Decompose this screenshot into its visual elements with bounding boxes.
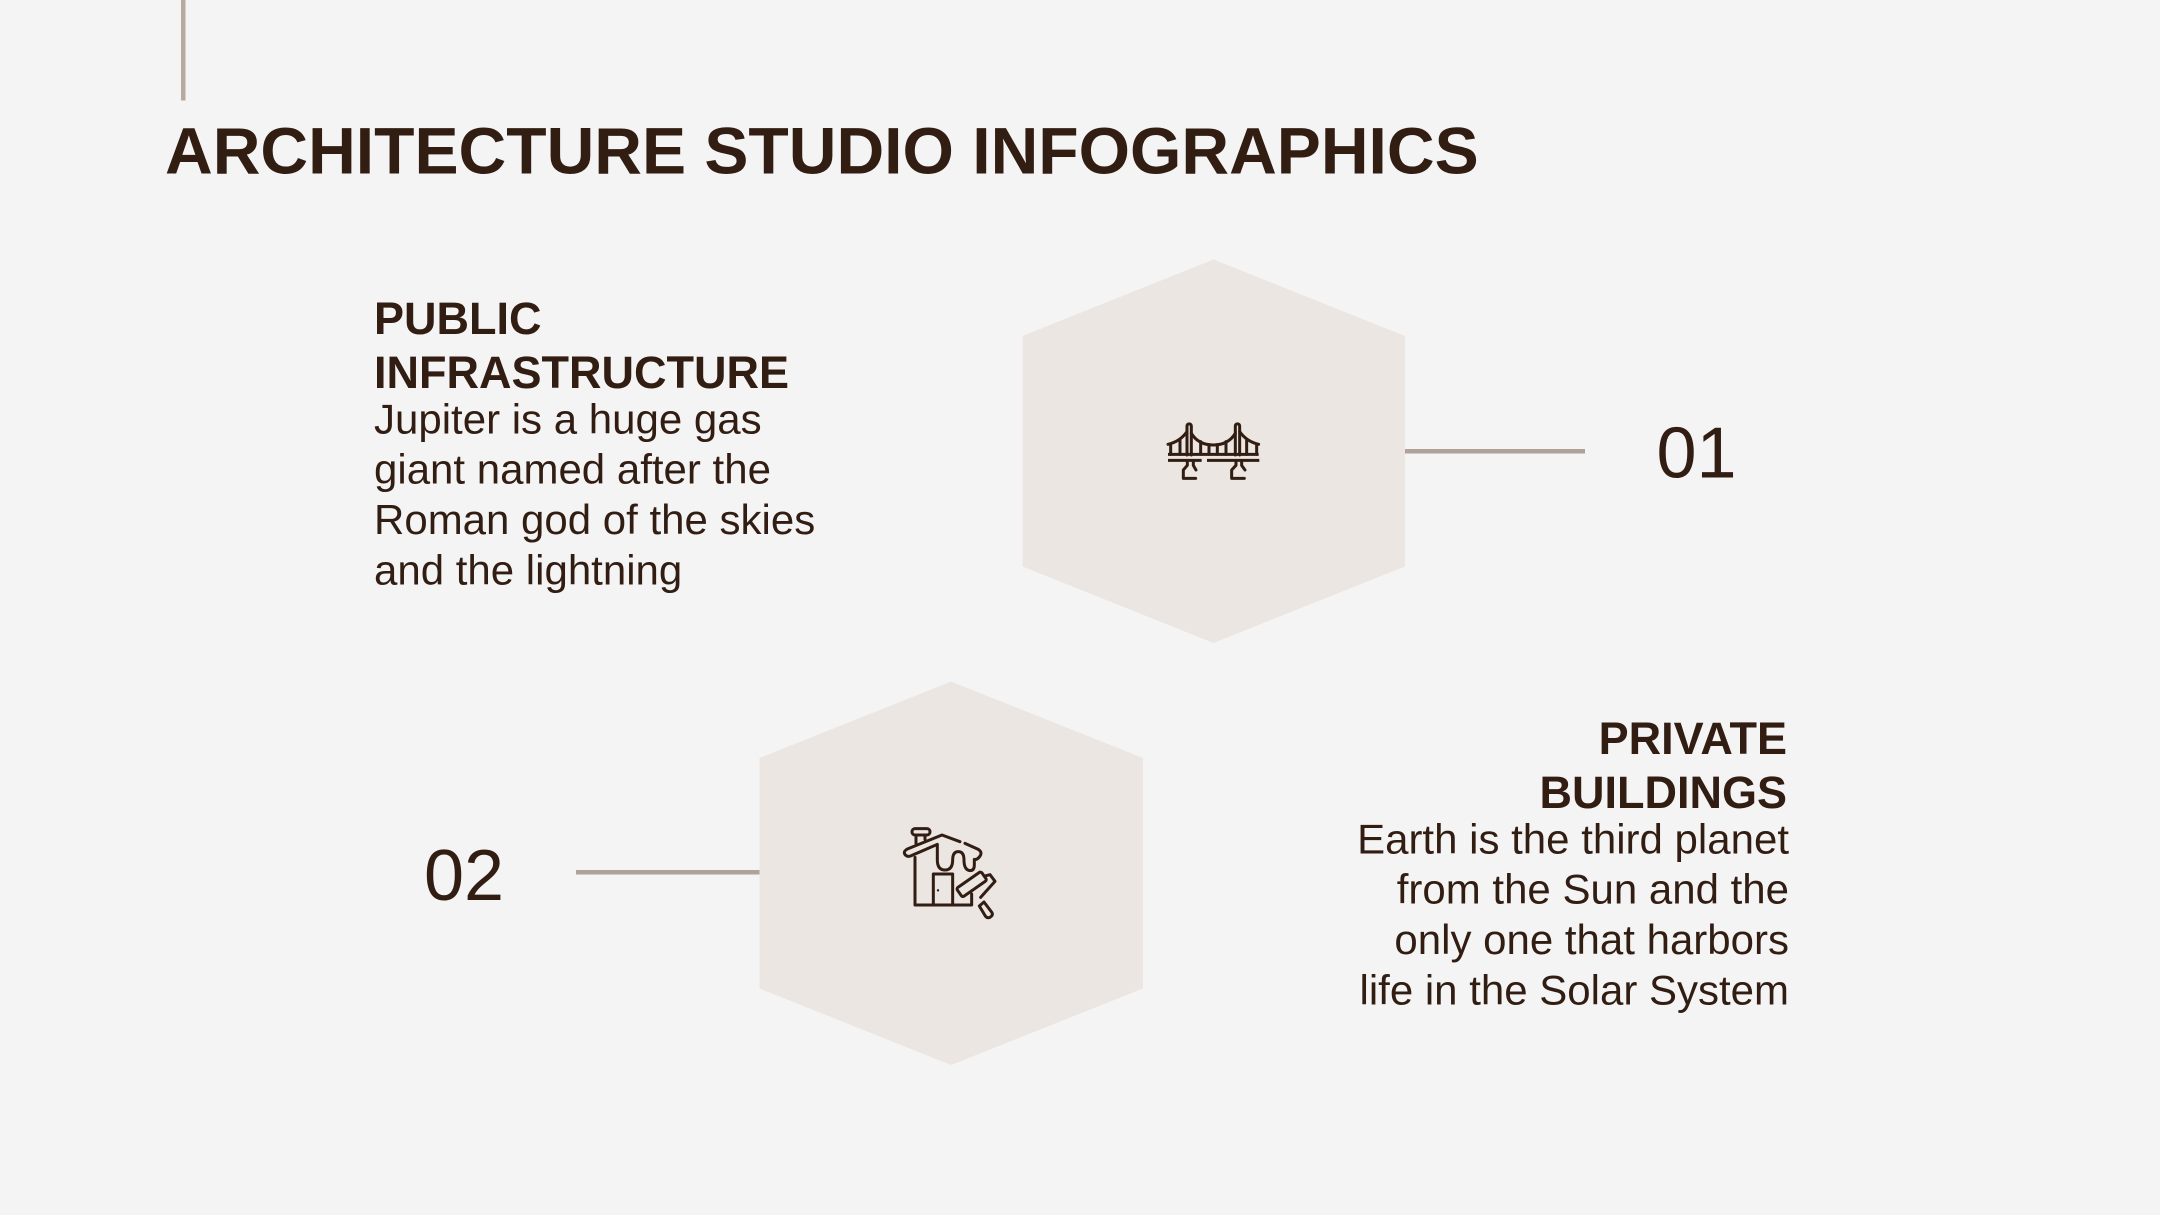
- hexagon 2: [760, 682, 1143, 1065]
- heading: public infrastructure: PUBLIC: [374, 293, 542, 344]
- hexagon 1: [1022, 260, 1405, 643]
- heading: private buildings: [1540, 713, 1787, 818]
- text block: public infrastructure: [374, 293, 815, 594]
- number 01: 01: [1656, 414, 1737, 494]
- accent bar: [181, 0, 186, 100]
- description: private buildings: Earth is the third planet: [1357, 816, 1789, 862]
- heading: public infrastructure: INFRASTRUCTURE: [374, 347, 789, 398]
- number 02: 02: [424, 836, 504, 916]
- description: private buildings: from the Sun and the: [1397, 866, 1789, 912]
- heading: private buildings: BUILDINGS: [1540, 767, 1787, 818]
- description: private buildings: only one that harbors: [1394, 916, 1789, 963]
- panel: private buildings: [424, 682, 1789, 1065]
- description: private buildings: life in the Solar System: [1359, 966, 1789, 1014]
- icon: bridge: [1168, 424, 1259, 478]
- heading: public infrastructure: [374, 293, 789, 398]
- panel: public infrastructure: [374, 260, 1737, 643]
- description: public infrastructure: giant named after the: [374, 446, 771, 492]
- description: public infrastructure: Roman god of the skies: [374, 496, 815, 543]
- connector line 1: [1405, 449, 1585, 454]
- text block: private buildings: [1357, 713, 1789, 1014]
- icon: house with paint roller: [904, 829, 995, 918]
- description: public infrastructure: and the lightning: [374, 546, 682, 594]
- heading: private buildings: PRIVATE: [1599, 713, 1787, 764]
- description: public infrastructure: Jupiter is a huge gas: [374, 396, 762, 442]
- connector line 2: [576, 870, 760, 874]
- description: public infrastructure: [374, 396, 815, 594]
- title: ARCHITECTURE STUDIO INFOGRAPHICS: [165, 114, 1479, 188]
- description: private buildings: [1357, 816, 1789, 1014]
